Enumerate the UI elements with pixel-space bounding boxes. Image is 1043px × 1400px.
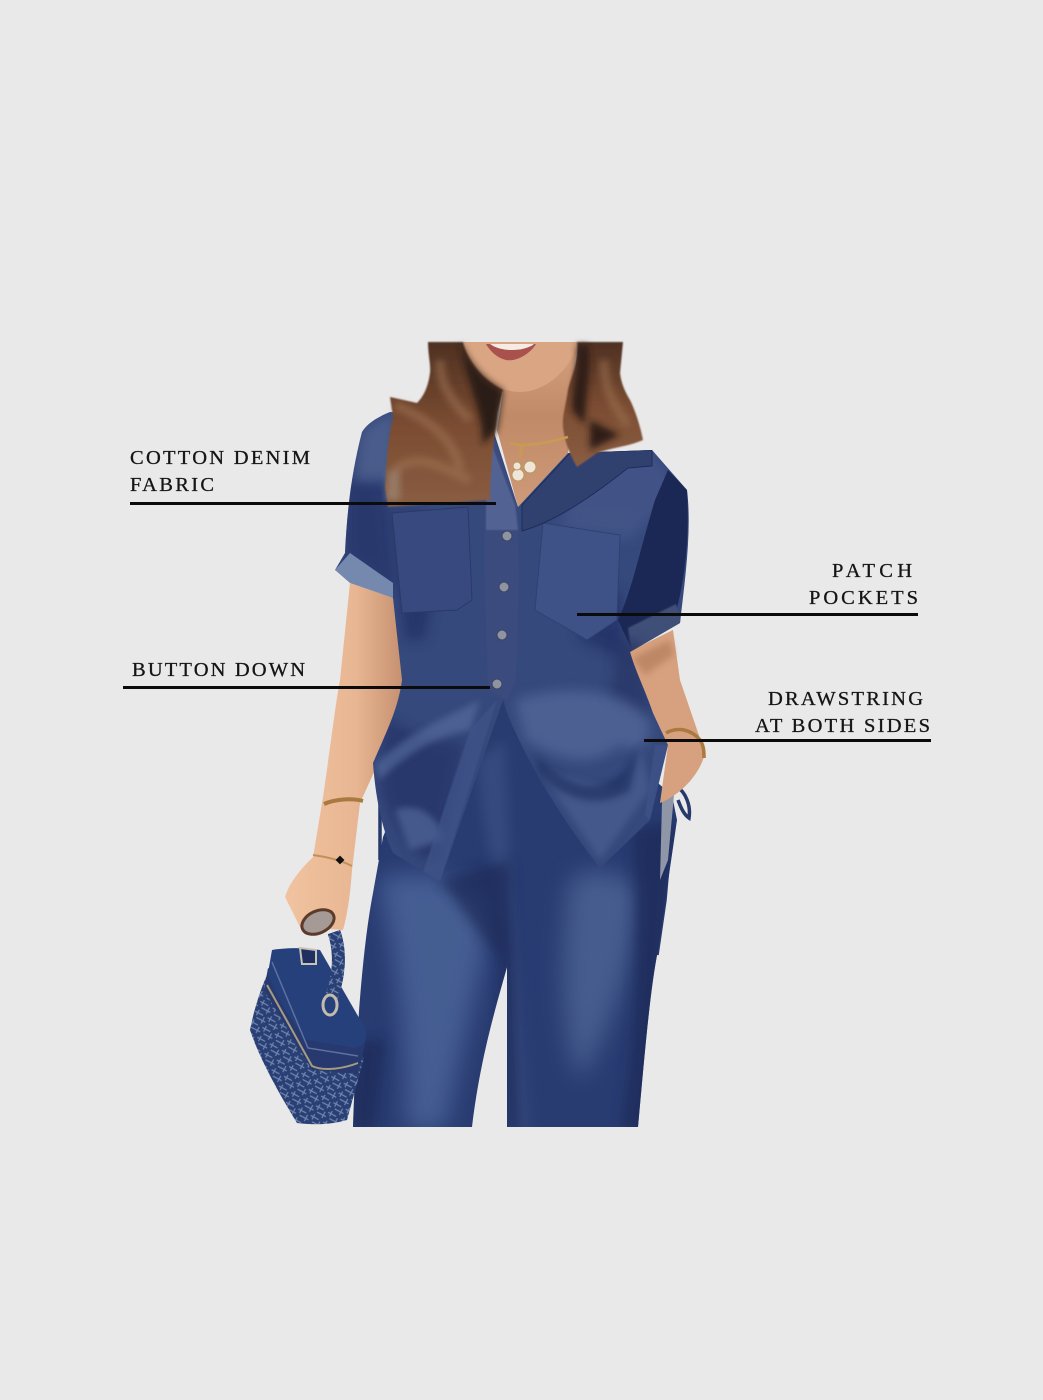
buckle	[323, 995, 337, 1015]
bag lid	[268, 948, 366, 1048]
right tail highlight	[515, 690, 650, 760]
left shoulder light	[355, 410, 395, 480]
right sleeve	[618, 470, 688, 650]
handle clip	[300, 948, 316, 964]
label: patch pockets: POCKETS	[809, 587, 918, 609]
drawstring	[380, 786, 689, 955]
pants right leg highlight	[563, 871, 640, 1080]
label: drawstring at both sides: AT BOTH SIDES	[755, 715, 930, 737]
placket light upper	[486, 449, 518, 530]
chin	[463, 342, 577, 392]
tweed body	[250, 973, 364, 1124]
right collar	[522, 450, 652, 531]
right chest dark fold	[610, 640, 650, 720]
chest dark patches	[392, 510, 625, 660]
handbag	[250, 932, 366, 1124]
right tail shadow	[537, 752, 639, 802]
wrist charm	[337, 857, 343, 863]
left hair dark core	[460, 345, 503, 445]
pants side stripe	[660, 795, 674, 880]
label: drawstring at both sides: DRAWSTRING	[768, 688, 923, 710]
left sleeve shading	[345, 480, 395, 590]
lid stitch	[272, 962, 358, 1056]
pendants	[512, 461, 536, 481]
neck and chest	[463, 342, 577, 507]
tail hems	[423, 700, 668, 882]
buttons	[492, 531, 512, 689]
label: button down	[123, 659, 490, 689]
right hair	[563, 342, 643, 467]
pants	[353, 700, 677, 1127]
label: drawstring at both sides	[644, 688, 931, 742]
necklace	[510, 437, 568, 458]
label: cotton denim fabric	[130, 447, 496, 505]
right arm and hand	[628, 630, 705, 803]
left tail highlight	[375, 700, 480, 850]
left hair fringe on shirt	[386, 470, 400, 500]
pants left leg highlight	[378, 874, 495, 1130]
pants dark shading	[350, 820, 675, 1130]
bag mid band	[264, 968, 366, 1074]
tweed handle	[331, 932, 338, 998]
left patch pocket	[392, 507, 472, 613]
right patch pocket	[535, 523, 620, 640]
shirt	[330, 405, 695, 890]
bracelets	[324, 799, 363, 804]
right hair dark core	[572, 345, 620, 450]
smile	[486, 344, 536, 360]
left hair	[385, 342, 503, 507]
teeth	[490, 344, 534, 350]
left hair highlights	[395, 360, 470, 480]
left arm and hand	[285, 583, 403, 930]
sunglasses in hand	[298, 905, 338, 939]
label: cotton denim fabric: FABRIC	[130, 474, 214, 496]
label: patch pockets	[577, 560, 918, 616]
left tail dark drape	[380, 715, 465, 862]
right hair highlights	[604, 360, 628, 425]
right arm shadow	[632, 640, 674, 675]
zipper	[267, 985, 358, 1069]
label: cotton denim fabric: COTTON DENIM	[130, 447, 310, 469]
label: button down: BUTTON DOWN	[132, 659, 305, 681]
right tail lower drape	[554, 756, 648, 856]
right shoulder light	[566, 450, 666, 536]
placket	[484, 420, 519, 700]
pants centre fold	[480, 750, 527, 1124]
right sleeve cuff	[628, 604, 682, 654]
right bracelet	[666, 729, 704, 758]
label: patch pockets: PATCH	[832, 560, 912, 582]
wrist chain	[313, 855, 352, 866]
left cuff	[335, 553, 393, 598]
fashion model figure	[250, 342, 705, 1130]
